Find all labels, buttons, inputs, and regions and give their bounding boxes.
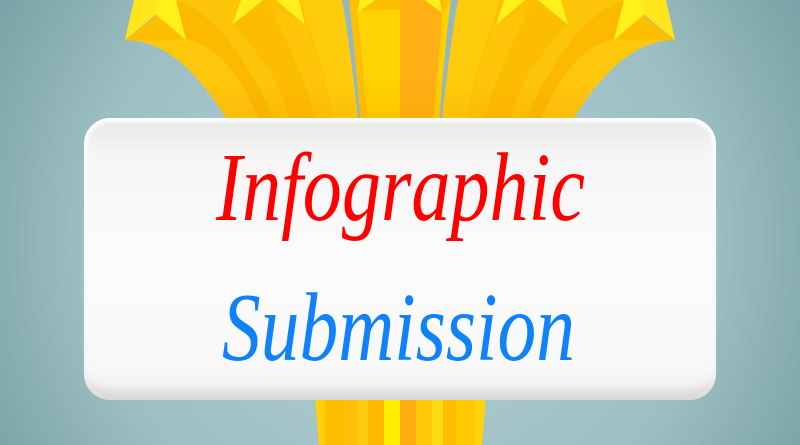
heading: Infographic: Infographic (215, 134, 585, 242)
beam shading (125, 0, 675, 136)
white card (84, 118, 716, 400)
centre beam (349, 0, 451, 136)
heading: Submission: Submission (222, 274, 575, 382)
second left star tip (232, 0, 305, 25)
gaps between beams (342, 0, 458, 136)
left star beams (125, 0, 362, 136)
left star tip (125, 0, 186, 40)
right star tip (614, 0, 675, 40)
second right star tip (496, 0, 568, 25)
centre star tip (357, 0, 442, 13)
right star beams (438, 0, 675, 136)
lower beam (315, 396, 486, 445)
